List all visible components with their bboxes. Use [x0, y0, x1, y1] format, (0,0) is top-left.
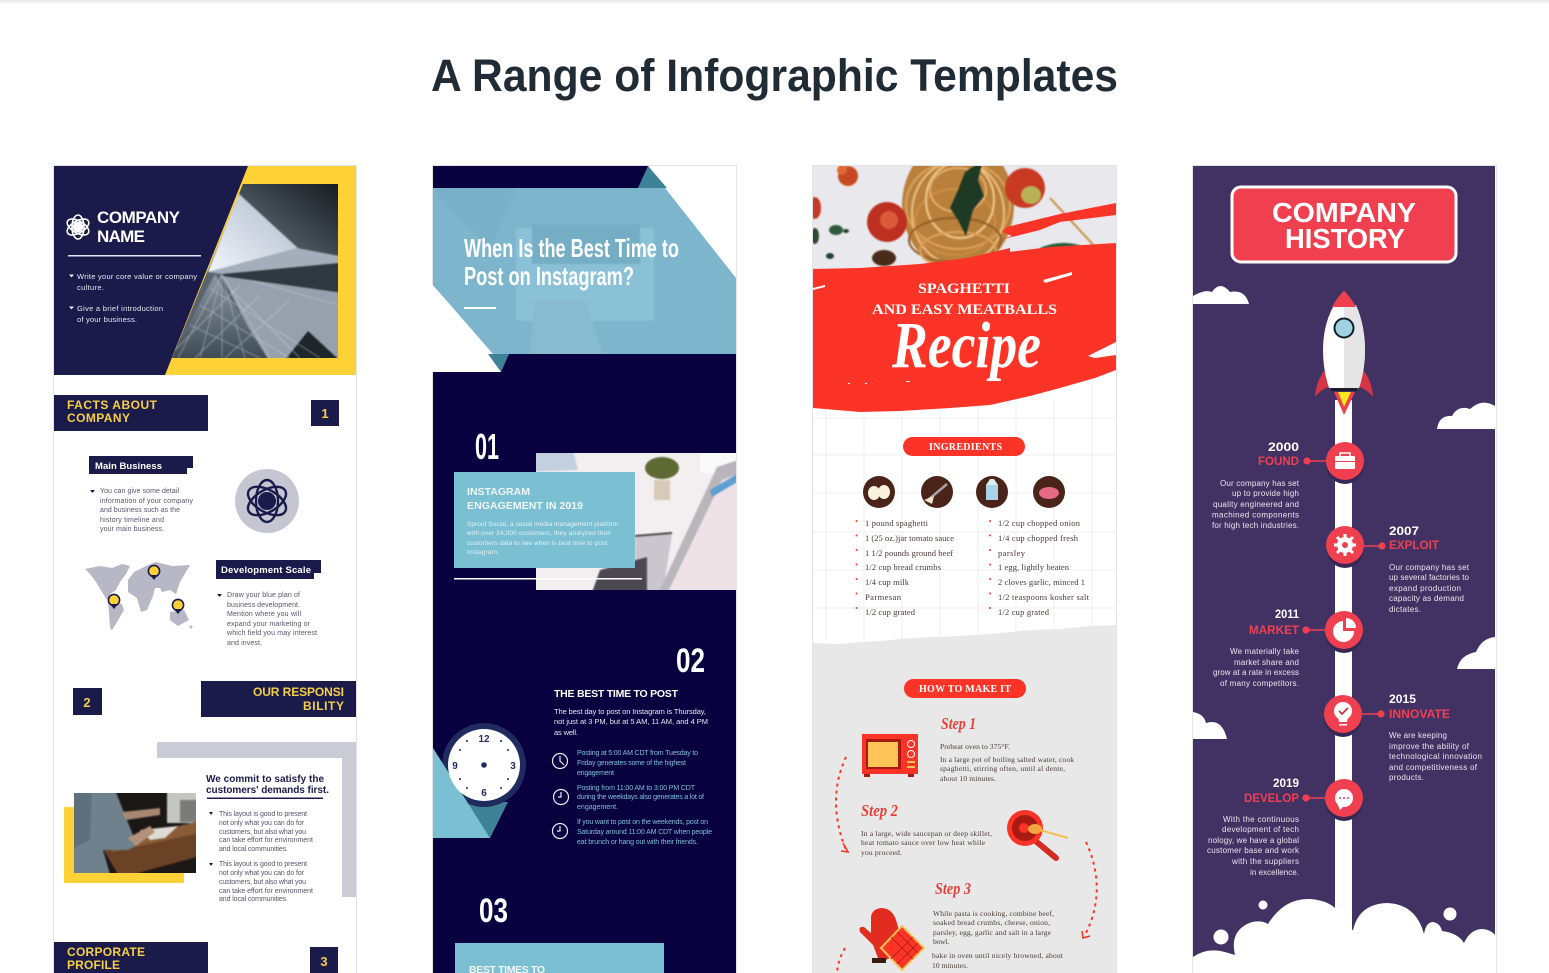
- milestone 2019: in excellence.: [1250, 868, 1299, 877]
- clock graphic: 9: [452, 761, 458, 772]
- milestone 2000: [1212, 440, 1364, 530]
- milestone 2000: Our company has set: [1220, 479, 1300, 488]
- top corner shapes: [432, 166, 736, 372]
- milestone 2019: nology, we have a global: [1208, 836, 1299, 845]
- section heading: corporate profile: CORPORATE: [67, 945, 145, 959]
- main business text: information of your company: [100, 498, 194, 505]
- timing list: engagement: [577, 770, 614, 777]
- red brush banner: [813, 203, 1116, 412]
- icon: saucepan: [1007, 810, 1068, 858]
- company name: [97, 208, 181, 246]
- milestone 2015: 2015: [1389, 692, 1416, 706]
- milestone 2007: Our company has set: [1389, 563, 1470, 572]
- icon: toolbox: [1335, 453, 1355, 469]
- icon: pie chart: [1333, 618, 1356, 642]
- milestone 2019: With the continuous: [1223, 815, 1299, 824]
- icon: clock 2: [554, 790, 568, 804]
- timing list: eat brunch or hang out with their friends.: [577, 839, 698, 846]
- step 2: In a large, wide saucepan or deep skillet,: [861, 829, 992, 838]
- step 3: parsley, egg, garlic and salt in a large: [933, 928, 1052, 937]
- milestone 2015: [1324, 692, 1482, 782]
- building photo: [172, 184, 338, 358]
- milestone 2015: improve the ability of: [1389, 742, 1470, 751]
- milestone 2007: EXPLOIT: [1389, 538, 1440, 552]
- clock graphic: [433, 723, 526, 838]
- number 2: [73, 688, 102, 715]
- milestone 2007: [1326, 524, 1470, 614]
- icon: atom logo: [65, 215, 91, 239]
- milestone 2000: FOUND: [1258, 454, 1299, 468]
- milestone 2011: market share and: [1234, 658, 1299, 667]
- ingredients list: 1/4 cup chopped fresh: [998, 533, 1079, 543]
- ingredients list: 1/2 cup grated: [865, 607, 916, 617]
- milestone 2000: quality engineered and: [1213, 500, 1299, 509]
- ingredients list: 1 pound spaghetti: [865, 518, 929, 528]
- timing list: [552, 750, 712, 846]
- clouds: [1193, 286, 1495, 739]
- instagram engagement box: [454, 472, 635, 568]
- milestone 2019: development of tech: [1222, 825, 1299, 834]
- milestone 2019: DEVELOP: [1244, 791, 1299, 805]
- instagram engagement box: customers data to see when is best time to post: [467, 540, 607, 547]
- development scale text: [217, 592, 317, 647]
- ingredients list: 1/4 cup milk: [865, 577, 910, 587]
- ingredients pill: INGREDIENTS: [929, 442, 1002, 453]
- instagram engagement box: INSTAGRAM: [467, 486, 530, 498]
- milestone 2000: 2000: [1268, 440, 1299, 454]
- bottom clouds: [1193, 899, 1495, 973]
- milestone 2015: INNOVATE: [1389, 707, 1450, 721]
- ingredients list: 1/2 cup chopped onion: [998, 518, 1081, 528]
- arrow: step 3 onward: [837, 948, 845, 973]
- ingredients list: parsley: [998, 548, 1026, 558]
- step 2: [861, 801, 992, 857]
- development scale text: expand your marketing or: [227, 621, 311, 628]
- milestone 2019: customer base and work: [1207, 846, 1300, 855]
- section heading: facts about company: FACTS ABOUT: [67, 398, 158, 412]
- milestone 2015: and competitiveness of: [1389, 763, 1478, 772]
- grey torn section: [813, 625, 1116, 973]
- section heading: our responsibility: BILITY: [303, 699, 344, 713]
- rocket trail: [1335, 400, 1352, 973]
- brush flecks: [813, 272, 1116, 384]
- clock graphic: 6: [481, 788, 487, 799]
- world map with pins: [85, 562, 192, 630]
- instagram engagement box: Sprout Social, a social media management platform: [467, 521, 618, 528]
- main business text: and business such as the: [100, 507, 180, 514]
- step 1: about 10 minutes.: [940, 774, 996, 783]
- title box: COMPANY: [1272, 197, 1416, 228]
- ingredients list: 2 cloves garlic, minced 1: [998, 577, 1085, 587]
- milestone 2019: with the suppliers: [1231, 857, 1299, 866]
- ingredients list: 1/2 teaspoons kosher salt: [998, 592, 1090, 602]
- milestone 2011: MARKET: [1249, 623, 1300, 637]
- timing list: engagement.: [577, 804, 618, 811]
- ingredients list: 1/2 cup grated: [998, 607, 1050, 617]
- step 3: bowl.: [933, 937, 949, 946]
- step 1: Step 1: [941, 714, 976, 733]
- ingredients list: 1 (25 oz.)jar tomato sauce: [865, 533, 954, 543]
- section heading: corporate profile: [54, 942, 208, 973]
- milestone 2007: dictates.: [1389, 605, 1421, 614]
- icon: speech bubble: [1335, 789, 1353, 810]
- milestone 2000: machined components: [1212, 510, 1299, 520]
- commitment text: can take effort for environment: [219, 837, 313, 844]
- milestone 2015: products.: [1389, 773, 1424, 782]
- arrow: step 2 to 3: [1082, 842, 1097, 938]
- how to make it pill: [904, 679, 1026, 698]
- yellow photo backing: [64, 807, 184, 883]
- number 03: 03: [479, 892, 508, 930]
- section heading: facts about company: COMPANY: [67, 411, 130, 425]
- best time text: as well.: [554, 728, 578, 737]
- timing list: Posting at 5:00 AM CDT from Tuesday to: [577, 750, 698, 757]
- icon: clock 3: [552, 824, 568, 838]
- milestone 2007: expand production: [1389, 584, 1461, 593]
- milestone 2000: for high tech industries.: [1212, 521, 1299, 530]
- section heading: our responsibility: OUR RESPONSI: [253, 685, 344, 699]
- commitment text: can take effort for environment: [219, 888, 313, 895]
- step 2: you proceed.: [861, 848, 902, 857]
- step 1: Preheat oven to 375°F.: [940, 742, 1010, 751]
- commitment text: [209, 811, 313, 903]
- best time text: not just at 3 PM, but at 5 AM, 11 AM, and 4 PM: [554, 717, 708, 726]
- step 1: [940, 714, 1074, 783]
- step 3: 10 minutes.: [932, 961, 968, 970]
- development scale tag: [216, 560, 321, 579]
- main business text: You can give some detail: [100, 488, 179, 495]
- spaghetti photo: [813, 166, 1116, 269]
- intro text: culture.: [77, 283, 104, 292]
- header banner: When Is the Best Time to: [464, 233, 679, 263]
- number 3: [310, 947, 338, 973]
- step 2: Step 2: [861, 801, 898, 820]
- recipe title: Recipe: [891, 309, 1041, 382]
- recipe title: [872, 281, 1057, 382]
- main business tag: Main Business: [95, 461, 162, 472]
- step 3: [932, 879, 1064, 970]
- commitment text: not only what you can do for: [219, 870, 305, 877]
- timing list: Posting from 11:00 AM to 3:00 PM CDT: [577, 785, 696, 792]
- development scale text: business development.: [227, 602, 300, 609]
- desk photo: [536, 453, 736, 590]
- intro text: Write your core value or company: [77, 272, 197, 281]
- number 01: 01: [475, 426, 499, 467]
- milestone 2011: [1213, 607, 1363, 688]
- milestone 2007: 2007: [1389, 524, 1419, 538]
- development scale tag: Development Scale: [221, 565, 311, 576]
- number 1: [311, 400, 339, 426]
- number 02: 02: [676, 642, 705, 680]
- intro text: of your business.: [77, 315, 137, 324]
- icon: clock 1: [552, 754, 568, 768]
- step 3: bake in oven until nicely browned, about: [932, 951, 1064, 960]
- icon: light bulb: [1334, 702, 1352, 726]
- panel: instagram template: [425, 166, 744, 973]
- ingredients list: [856, 518, 1090, 617]
- step 2: heat tomato sauce over low heat while: [861, 838, 986, 847]
- icon: oven mitt: [860, 908, 924, 970]
- development scale text: Mention where you will: [227, 611, 301, 618]
- header banner: [54, 166, 356, 375]
- commitment text: customers, but also what you: [219, 879, 306, 886]
- recipe title: SPAGHETTI: [918, 281, 1010, 297]
- rocket: [1315, 291, 1373, 415]
- grey corner frame: [157, 742, 356, 897]
- development scale text: which field you may interest: [226, 630, 317, 637]
- commitment heading: We commit to satisfy the: [206, 774, 324, 785]
- how to make it pill: HOW TO MAKE IT: [919, 684, 1011, 695]
- recipe title: AND EASY MEATBALLS: [872, 302, 1057, 318]
- milestone 2011: 2011: [1275, 607, 1299, 621]
- commitment heading: [206, 774, 329, 799]
- instagram engagement box: with over 24,000 customers, they analyzed their: [466, 530, 612, 537]
- company name: COMPANY: [97, 208, 181, 227]
- header banner: [433, 188, 736, 354]
- commitment text: customers, but also what you: [219, 829, 306, 836]
- icon: microwave: [862, 734, 918, 777]
- development scale text: and invest.: [227, 640, 262, 647]
- section heading: corporate profile: PROFILE: [67, 958, 120, 972]
- timing list: Saturday around 11:00 AM CDT when people: [577, 829, 712, 836]
- header banner: Post on Instagram?: [464, 261, 634, 291]
- timing list: Friday generates some of the highest: [577, 760, 686, 767]
- instagram engagement box: ENGAGEMENT IN 2019: [467, 500, 583, 512]
- title box: [1232, 187, 1456, 262]
- arrow: step 1 to 2: [836, 757, 848, 852]
- milestone 2007: capacity as demand: [1389, 594, 1464, 603]
- section heading: facts about company: [54, 395, 208, 431]
- timing list: during the weekdays also generates a lot of: [577, 794, 704, 801]
- milestone 2019: 2019: [1273, 776, 1299, 790]
- ingredients pill: [903, 437, 1025, 456]
- icon: gear: [1334, 534, 1356, 556]
- timing list: If you want to post on the weekends, post on: [577, 819, 708, 826]
- main business text: your main business.: [100, 526, 164, 533]
- main business text: history timeline and: [100, 517, 164, 524]
- number 3: 3: [320, 954, 328, 969]
- company name: NAME: [97, 227, 145, 246]
- intro text: [69, 272, 197, 324]
- title box: HISTORY: [1285, 223, 1405, 254]
- best times box: [455, 943, 664, 973]
- milestone 2011: We materially take: [1230, 647, 1300, 656]
- clock graphic: 3: [510, 761, 516, 772]
- section heading: our responsibility: [201, 681, 356, 717]
- ingredients list: 1 egg, lightly beaten: [998, 562, 1070, 572]
- commitment text: This layout is good to present: [219, 811, 307, 818]
- intro text: Give a brief introduction: [77, 304, 163, 313]
- ingredients list: Parmesan: [865, 592, 902, 602]
- clock graphic: 12: [478, 734, 490, 745]
- main business text: [90, 488, 194, 533]
- milestone 2011: of many competitors.: [1220, 679, 1299, 688]
- step 3: soaked bread crumbs, cheese, onion,: [933, 918, 1050, 927]
- milestone 2011: grow at a rate in excess: [1213, 668, 1299, 677]
- panel: recipe template: [805, 139, 1124, 973]
- panel: company profile template: [54, 166, 356, 973]
- best time text: The best day to post on Instagram is Thursday,: [554, 707, 706, 716]
- title: A Range of Infographic Templates: [431, 50, 1118, 101]
- milestone 2000: up to provide high: [1232, 489, 1299, 498]
- development scale text: Draw your blue plan of: [227, 592, 300, 599]
- milestone 2015: We are keeping: [1389, 731, 1447, 740]
- milestone 2007: up several factories to: [1389, 573, 1470, 582]
- step 3: Step 3: [935, 879, 971, 898]
- meeting photo: [74, 793, 196, 873]
- commitment text: and local communities.: [219, 896, 288, 903]
- best time heading: THE BEST TIME TO POST: [554, 688, 679, 700]
- milestone 2019: [1207, 776, 1363, 877]
- commitment text: This layout is good to present: [219, 861, 307, 868]
- commitment heading: customers' demands first.: [206, 785, 329, 796]
- step 1: In a large pot of boiling salted water, cook: [940, 755, 1074, 764]
- commitment text: not only what you can do for: [219, 820, 305, 827]
- ingredients list: 1 1/2 pounds ground beef: [865, 548, 953, 558]
- main business tag: [89, 456, 193, 474]
- number 2: 2: [83, 695, 91, 710]
- instagram engagement box: Instagram.: [467, 549, 499, 556]
- ingredients list: 1/2 cup bread crumbs: [865, 562, 941, 572]
- milestone 2015: technological innovation: [1389, 752, 1482, 761]
- step 3: While pasta is cooking, combine beef,: [933, 909, 1054, 918]
- ingredient icons: [863, 476, 1065, 508]
- step 1: spaghetti, stirring often, until al dente,: [940, 764, 1065, 773]
- commitment text: and local communities.: [219, 846, 288, 853]
- panel: company history template: [1192, 166, 1496, 973]
- icon: atom badge: [235, 469, 299, 533]
- best time text: [554, 707, 708, 737]
- number 1: 1: [321, 406, 329, 421]
- grid background: [813, 370, 1116, 640]
